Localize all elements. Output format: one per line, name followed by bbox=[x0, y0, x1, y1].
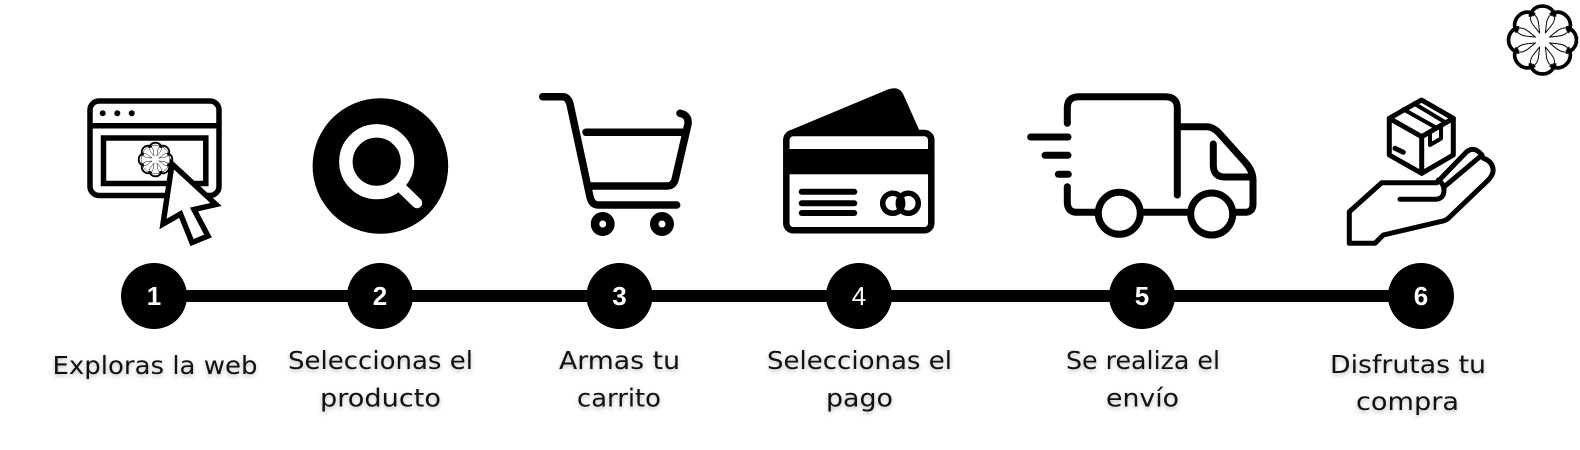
step 2 marker bbox=[347, 263, 413, 329]
step 4 label bbox=[767, 346, 952, 412]
step 4 label: Seleccionas el bbox=[767, 346, 952, 375]
step 5 label: envío bbox=[1106, 384, 1179, 412]
icon: credit card bbox=[784, 89, 934, 230]
step 4 marker bbox=[826, 263, 892, 329]
step 1 marker: 1 bbox=[147, 281, 161, 311]
timeline connector bbox=[154, 290, 1421, 302]
step 6 label: Disfrutas tu bbox=[1330, 350, 1486, 379]
step 2 label: producto bbox=[320, 384, 441, 412]
icon: delivery truck bbox=[1031, 97, 1253, 235]
step 2 marker: 2 bbox=[373, 281, 387, 311]
step 5 marker bbox=[1109, 263, 1175, 329]
step 3 label bbox=[559, 346, 680, 412]
step 3 marker bbox=[586, 263, 652, 329]
step 6 marker: 6 bbox=[1414, 281, 1428, 311]
step 5 marker: 5 bbox=[1135, 281, 1149, 311]
step 1 label: Exploras la web bbox=[52, 351, 258, 380]
icon: shopping cart bbox=[543, 97, 688, 232]
step 5 label: Se realiza el bbox=[1066, 346, 1220, 375]
logo: flower bbox=[1509, 6, 1576, 74]
icon: browser window with cursor bbox=[90, 101, 219, 242]
step 5 label bbox=[1066, 346, 1220, 412]
step 3 marker: 3 bbox=[612, 281, 627, 311]
step 1 marker bbox=[121, 263, 187, 329]
step 2 label bbox=[288, 346, 473, 412]
step 4 label: pago bbox=[826, 384, 893, 412]
step 6 marker bbox=[1388, 263, 1454, 329]
step 3 label: Armas tu bbox=[559, 346, 680, 375]
step 2 label: Seleccionas el bbox=[288, 346, 473, 375]
icon: hand holding parcel bbox=[1349, 100, 1493, 243]
step 4 marker: 4 bbox=[852, 281, 866, 311]
step 3 label: carrito bbox=[577, 384, 661, 412]
step 6 label: compra bbox=[1356, 387, 1459, 416]
step 6 label bbox=[1330, 350, 1486, 416]
icon: magnifier in circle bbox=[313, 98, 448, 234]
